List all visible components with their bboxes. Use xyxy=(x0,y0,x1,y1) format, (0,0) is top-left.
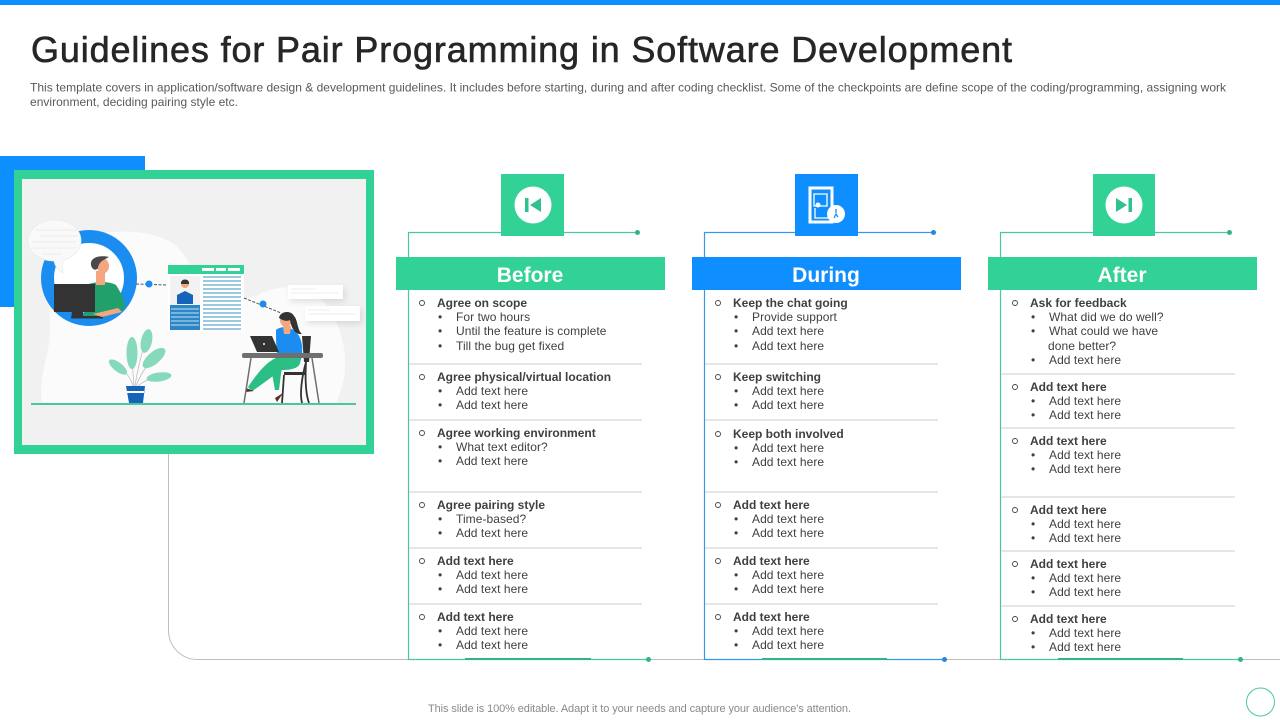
checklist: Add text here xyxy=(456,638,528,652)
checklist: • xyxy=(438,454,442,468)
checklist: Add text here xyxy=(1049,531,1121,545)
checklist: • xyxy=(734,398,738,412)
dividers xyxy=(705,364,938,604)
checklist: • xyxy=(438,568,442,582)
checklist: Keep the chat going xyxy=(733,296,848,310)
checklist xyxy=(420,296,611,652)
profile document xyxy=(168,265,244,331)
illustration panel xyxy=(0,156,374,454)
checklist: Add text here xyxy=(1030,612,1107,626)
checklist: • xyxy=(734,339,738,353)
checklist: • xyxy=(1031,394,1035,408)
checklist: • xyxy=(438,582,442,596)
checklist: • xyxy=(438,324,442,338)
title: Guidelines for Pair Programming in Software Development xyxy=(31,29,1012,70)
checklist xyxy=(1012,296,1164,654)
connector frame xyxy=(704,232,944,660)
checklist: • xyxy=(734,526,738,540)
checklist: Agree pairing style xyxy=(437,498,545,512)
checklist: • xyxy=(438,624,442,638)
checklist: • xyxy=(438,310,442,324)
checklist: • xyxy=(734,512,738,526)
checklist: For two hours xyxy=(456,310,530,324)
dashed links xyxy=(136,284,281,313)
header xyxy=(692,257,961,290)
checklist: done better? xyxy=(1048,339,1116,353)
gray connector line xyxy=(168,454,1280,660)
speech bubble xyxy=(28,220,81,273)
checklist: Add text here xyxy=(456,624,528,638)
header: During xyxy=(792,264,860,287)
checklist: • xyxy=(1031,571,1035,585)
checklist: Add text here xyxy=(752,398,824,412)
column: After xyxy=(988,174,1257,662)
checklist: • xyxy=(734,310,738,324)
checklist: • xyxy=(734,638,738,652)
checklist: • xyxy=(438,398,442,412)
checklist: Add text here xyxy=(456,582,528,596)
checklist: Till the bug get fixed xyxy=(456,339,564,353)
icon: door with clock xyxy=(795,174,858,236)
checklist: • xyxy=(734,455,738,469)
checklist: • xyxy=(1031,531,1035,545)
checklist: Add text here xyxy=(733,554,810,568)
column: During xyxy=(692,174,961,662)
checklist: • xyxy=(1031,353,1035,367)
checklist: • xyxy=(1031,517,1035,531)
man in blue ring xyxy=(48,236,130,320)
connector frame xyxy=(1000,232,1240,660)
checklist: • xyxy=(734,324,738,338)
checklist: Keep both involved xyxy=(733,427,844,441)
checklist: Add text here xyxy=(456,526,528,540)
dividers xyxy=(1001,374,1235,606)
checklist: • xyxy=(1031,626,1035,640)
checklist xyxy=(716,296,848,652)
checklist: • xyxy=(438,512,442,526)
checklist: • xyxy=(1031,408,1035,422)
column: Before xyxy=(396,174,665,662)
checklist: Add text here xyxy=(752,324,824,338)
checklist: • xyxy=(1031,310,1035,324)
checklist: • xyxy=(1031,324,1035,338)
checklist: • xyxy=(734,384,738,398)
note cards xyxy=(288,285,360,321)
checklist: Time-based? xyxy=(456,512,527,526)
checklist: • xyxy=(1031,448,1035,462)
checklist: Add text here xyxy=(1049,626,1121,640)
checklist: Add text here xyxy=(752,384,824,398)
checklist: • xyxy=(1031,640,1035,654)
checklist: Add text here xyxy=(752,582,824,596)
checklist: Add text here xyxy=(1030,380,1107,394)
checklist: Add text here xyxy=(1049,394,1121,408)
connector frame xyxy=(408,232,648,660)
checklist: • xyxy=(438,526,442,540)
checklist: Add text here xyxy=(437,554,514,568)
icon: skip back xyxy=(501,174,564,236)
header: After xyxy=(1097,264,1147,287)
checklist: What text editor? xyxy=(456,440,548,454)
checklist: Add text here xyxy=(1049,353,1121,367)
checklist: • xyxy=(734,441,738,455)
footer note: This slide is 100% editable. Adapt it to your needs and capture your audience's attention. xyxy=(428,703,851,715)
checklist: What could we have xyxy=(1049,324,1158,338)
checklist: Agree working environment xyxy=(437,426,596,440)
checklist: • xyxy=(734,568,738,582)
checklist: Add text here xyxy=(1030,434,1107,448)
checklist: Add text here xyxy=(1049,408,1121,422)
intro text xyxy=(30,80,1227,109)
intro text: This template covers in application/software design & development guidelines. It includes before starting, during and after coding checklist. Some of the checkpoints are define scope of the coding/programming, assigning work xyxy=(30,80,1227,94)
checklist: Add text here xyxy=(752,441,824,455)
checklist: Until the feature is complete xyxy=(456,324,607,338)
checklist: What did we do well? xyxy=(1049,310,1164,324)
checklist: Add text here xyxy=(1049,640,1121,654)
checklist: • xyxy=(438,638,442,652)
plant xyxy=(107,328,172,403)
checklist: Add text here xyxy=(1030,557,1107,571)
background blobs xyxy=(41,232,345,403)
checklist: Add text here xyxy=(1030,503,1107,517)
checklist: Add text here xyxy=(456,398,528,412)
checklist: • xyxy=(438,440,442,454)
checklist: Add text here xyxy=(752,526,824,540)
checklist: Add text here xyxy=(752,339,824,353)
checklist: Add text here xyxy=(456,568,528,582)
checklist: Add text here xyxy=(733,498,810,512)
checklist: Add text here xyxy=(752,568,824,582)
checklist: Add text here xyxy=(752,638,824,652)
header xyxy=(396,257,665,290)
dividers xyxy=(409,364,642,604)
checklist: Add text here xyxy=(752,455,824,469)
checklist: Add text here xyxy=(733,610,810,624)
checklist: Add text here xyxy=(1049,462,1121,476)
checklist: Add text here xyxy=(752,512,824,526)
checklist: Add text here xyxy=(1049,571,1121,585)
checklist: Add text here xyxy=(456,454,528,468)
floor line xyxy=(31,403,356,405)
checklist: • xyxy=(1031,462,1035,476)
checklist: Ask for feedback xyxy=(1030,296,1127,310)
checklist: Add text here xyxy=(1049,517,1121,531)
checklist: Add text here xyxy=(1049,448,1121,462)
checklist: Keep switching xyxy=(733,370,821,384)
checklist: Add text here xyxy=(752,624,824,638)
checklist: • xyxy=(438,339,442,353)
checklist: • xyxy=(734,582,738,596)
woman at desk xyxy=(242,312,323,403)
checklist: Add text here xyxy=(456,384,528,398)
page marker circle xyxy=(1246,688,1274,716)
icon: skip forward xyxy=(1093,174,1155,236)
header xyxy=(988,257,1257,290)
checklist: • xyxy=(438,384,442,398)
checklist: Agree physical/virtual location xyxy=(437,370,611,384)
checklist: Add text here xyxy=(1049,585,1121,599)
intro text: environment, deciding pairing style etc. xyxy=(30,95,238,109)
header: Before xyxy=(497,264,563,287)
checklist: Agree on scope xyxy=(437,296,527,310)
checklist: • xyxy=(1031,585,1035,599)
checklist: Add text here xyxy=(437,610,514,624)
checklist: • xyxy=(734,624,738,638)
checklist: Provide support xyxy=(752,310,838,324)
